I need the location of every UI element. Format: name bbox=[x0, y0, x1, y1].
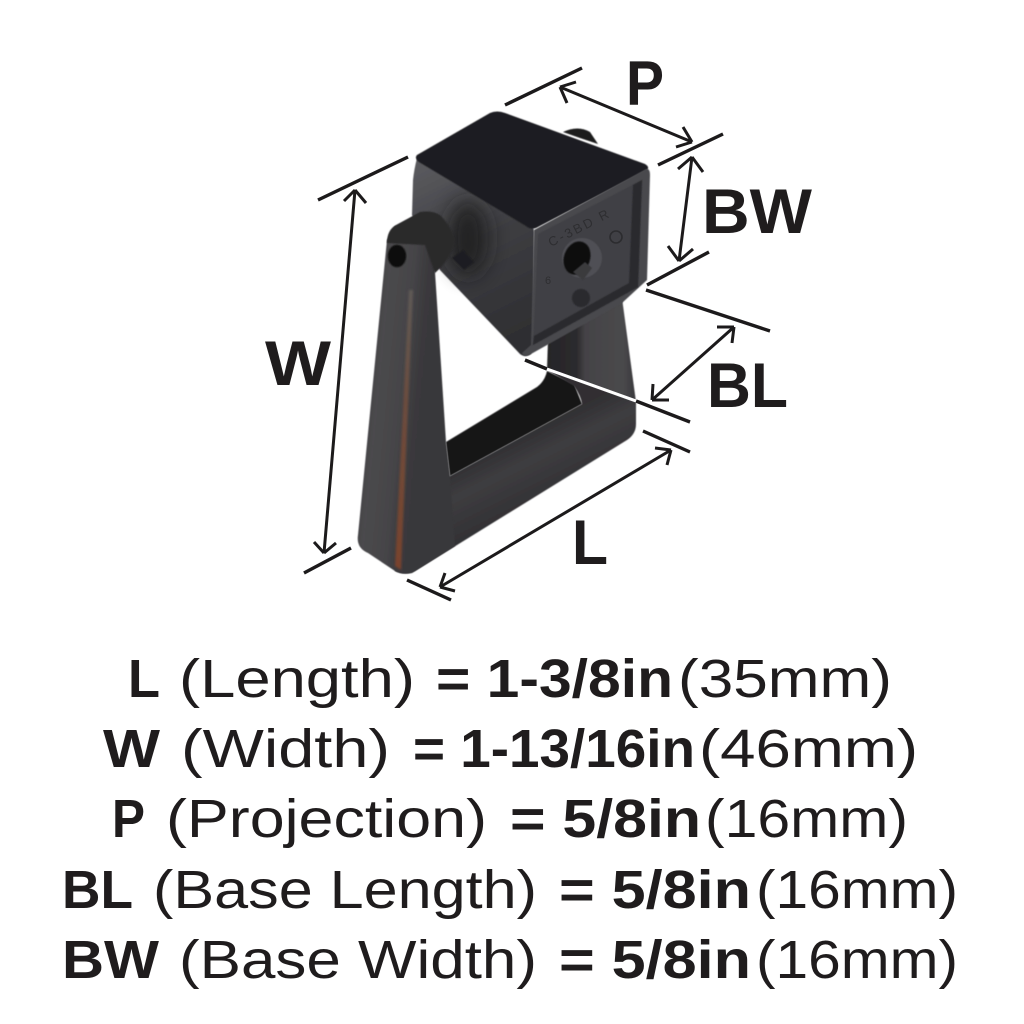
BL dimension bbox=[525, 290, 770, 422]
base block top face bbox=[416, 112, 648, 229]
embossed part number: C-3BD R bbox=[546, 206, 611, 250]
bronze highlight streak bbox=[395, 290, 413, 570]
dimension list bbox=[62, 649, 958, 990]
row: base length: BL bbox=[62, 860, 133, 920]
label BW: BW bbox=[702, 177, 813, 247]
label BL: BL bbox=[707, 351, 788, 421]
base block recessed panel bbox=[533, 180, 642, 345]
row: base length: = 5/8in bbox=[559, 860, 751, 920]
row: base length: (Base Length) bbox=[153, 860, 537, 920]
row: projection: (16mm) bbox=[705, 789, 908, 849]
BW dimension bbox=[647, 157, 709, 285]
product photo: drop pull handle bbox=[358, 112, 650, 574]
label W: W bbox=[265, 329, 332, 399]
base block left face bbox=[412, 158, 534, 356]
row: base width bbox=[62, 930, 958, 990]
row: length: = 1-3/8in bbox=[436, 649, 673, 709]
label P: P bbox=[626, 49, 664, 119]
row: width: = 1-13/16in bbox=[413, 719, 695, 779]
row: projection: = 5/8in bbox=[510, 789, 701, 849]
handle left arm bbox=[358, 225, 455, 574]
screw hole bbox=[559, 238, 595, 278]
L dimension bbox=[407, 431, 690, 600]
row: base width: (16mm) bbox=[756, 930, 958, 990]
row: base width: = 5/8in bbox=[559, 930, 751, 990]
row: length: L bbox=[128, 649, 160, 709]
row: length bbox=[128, 649, 892, 709]
base block front rim bbox=[522, 169, 650, 356]
handle rear post bbox=[547, 298, 636, 402]
small screw bbox=[452, 250, 474, 270]
rear stud behind base bbox=[563, 128, 598, 144]
P dimension bbox=[505, 68, 723, 165]
row: projection bbox=[112, 789, 908, 849]
row: length: (Length) bbox=[179, 649, 415, 709]
handle inner dark face bbox=[446, 371, 582, 476]
knuckle hole bbox=[388, 245, 406, 267]
embossed logo mark bbox=[610, 231, 622, 243]
row: width: (46mm) bbox=[699, 719, 918, 779]
row: projection: (Projection) bbox=[166, 789, 487, 849]
row: base length: (16mm) bbox=[756, 860, 958, 920]
W dimension bbox=[304, 157, 408, 573]
screw hole surround bbox=[562, 238, 602, 278]
dimension lines and arrows bbox=[304, 68, 770, 600]
row: projection: P bbox=[112, 789, 145, 849]
row: length: (35mm) bbox=[678, 649, 892, 709]
panel inner shadow edges bbox=[533, 180, 642, 345]
handle bottom bar bbox=[395, 370, 636, 574]
row: width: W bbox=[103, 719, 160, 779]
embossed digit: 6 bbox=[545, 275, 551, 287]
hole thread highlight bbox=[573, 262, 592, 280]
row: width: (Width) bbox=[181, 719, 390, 779]
row: width bbox=[103, 719, 918, 779]
row: base width: BW bbox=[62, 930, 159, 990]
row: base length bbox=[62, 860, 958, 920]
shadow on base block bbox=[448, 200, 488, 276]
locating pin bbox=[572, 289, 590, 307]
label L: L bbox=[572, 508, 608, 578]
row: base width: (Base Width) bbox=[179, 930, 537, 990]
handle knuckle bbox=[387, 212, 455, 273]
